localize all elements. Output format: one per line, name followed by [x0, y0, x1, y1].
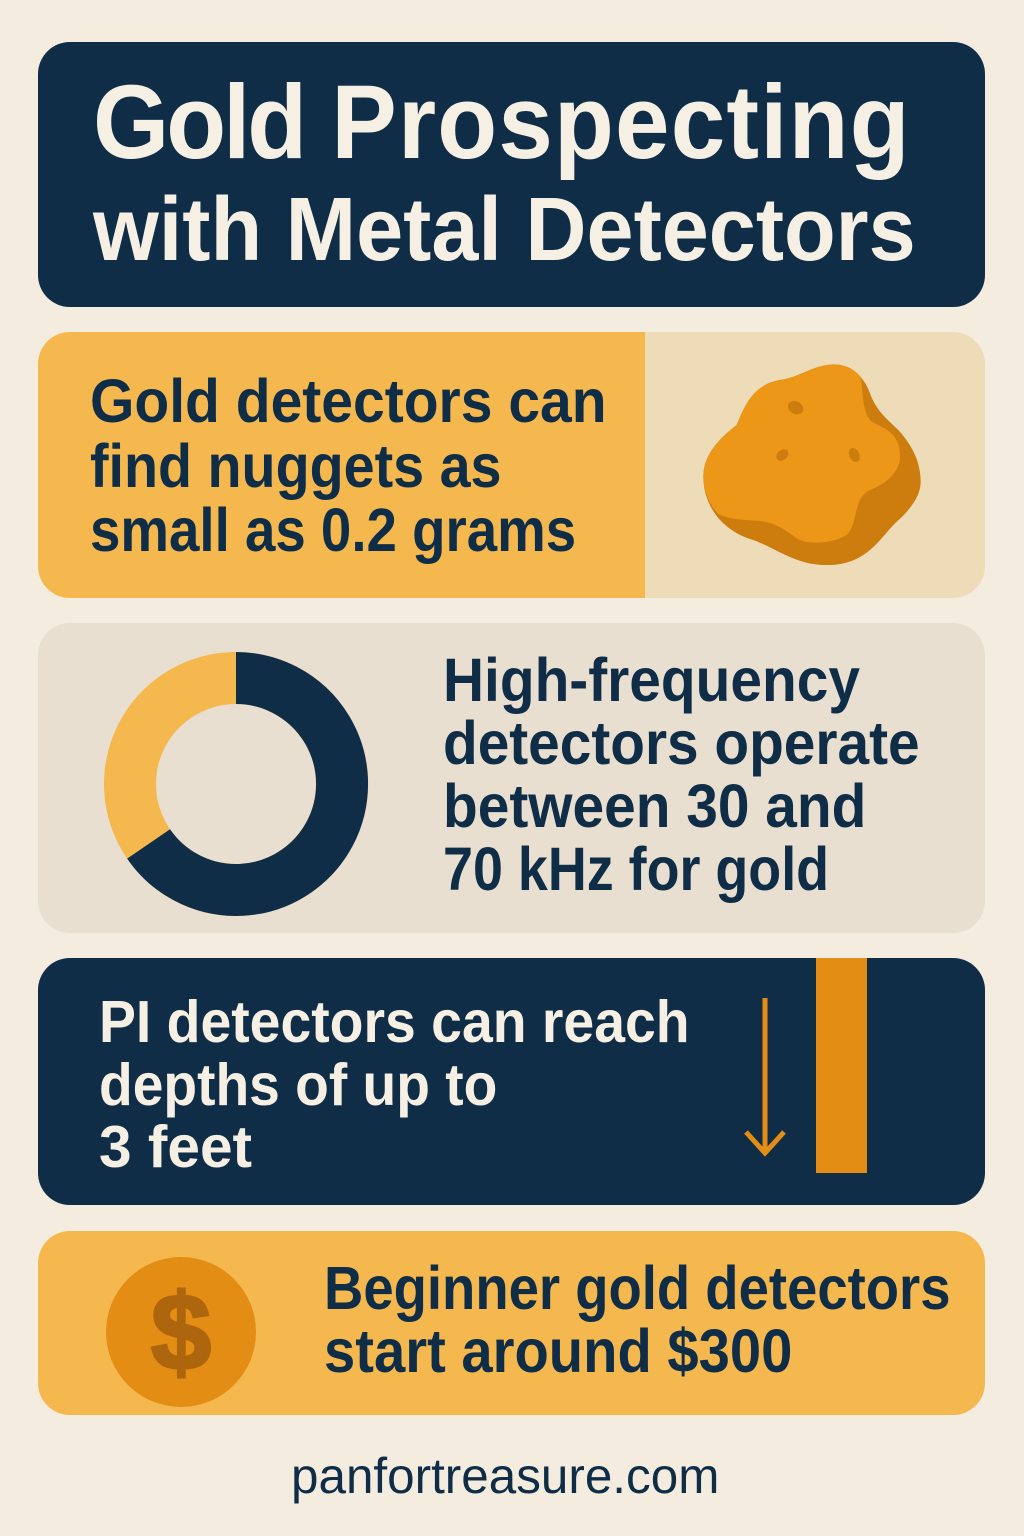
icon: down arrow — [744, 998, 786, 1157]
panel: price fact — [38, 1231, 985, 1415]
panel: depth fact — [38, 958, 985, 1205]
nugget fact text: find nuggets as — [90, 432, 502, 500]
icon: dollar coin: $ — [151, 1271, 211, 1392]
nugget fact text: small as 0.2 grams — [90, 496, 576, 564]
panel: title — [38, 42, 985, 307]
heading line 2: with Metal Detectors — [93, 180, 916, 280]
depth fact text: PI detectors can reach — [99, 989, 690, 1055]
frequency fact text: detectors operate — [443, 709, 920, 777]
panel: frequency fact — [38, 623, 985, 933]
panel: nugget fact — [38, 332, 985, 598]
heading line 1: Gold Prospecting — [93, 64, 911, 181]
price fact text: Beginner gold detectors — [324, 1254, 951, 1322]
nugget fact text — [90, 367, 607, 564]
icon: gold nugget — [703, 364, 921, 565]
price fact text — [324, 1254, 951, 1385]
frequency fact text: 70 kHz for gold — [443, 835, 829, 903]
icon: dollar coin — [106, 1257, 256, 1407]
frequency fact text — [443, 646, 920, 903]
frequency fact text: between 30 and — [443, 772, 866, 840]
footer website: panfortreasure.com — [291, 1448, 719, 1504]
nugget fact text: Gold detectors can — [90, 367, 607, 435]
depth fact text: 3 feet — [99, 1114, 252, 1180]
donut chart — [104, 652, 368, 916]
depth bar — [816, 958, 867, 1173]
depth fact text: depths of up to — [99, 1052, 497, 1118]
frequency fact text: High-frequency — [443, 646, 860, 714]
fact background — [38, 332, 645, 598]
depth fact text — [99, 989, 690, 1180]
price fact text: start around $300 — [324, 1317, 792, 1385]
